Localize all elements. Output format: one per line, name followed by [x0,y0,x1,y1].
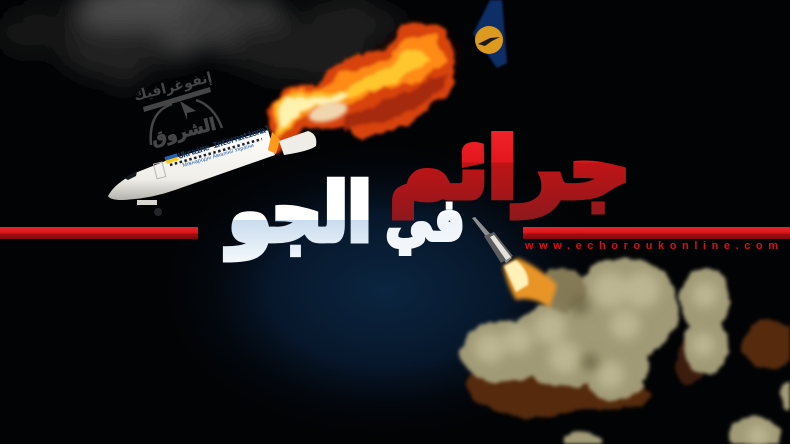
watermark heading: إنفوغرافيك [132,70,214,105]
cloud highlights [475,272,769,444]
broken edge [268,132,280,154]
tail fin [473,0,507,68]
cockpit window [124,171,137,180]
flag [164,153,179,164]
landing gear [137,200,162,216]
fire [268,24,456,152]
flame core [504,260,528,292]
smoke [0,0,405,82]
airline subtitle: Міжнародні Авіалінії України [182,143,255,169]
word: in: في [385,186,465,254]
watermark arrow [180,101,196,120]
explosion cloud [459,258,790,444]
fire pale smoke [306,98,350,126]
cloud shadow [467,321,790,417]
watermark bar [143,87,211,112]
left red bar [0,227,198,239]
title: red: جرائم [390,121,630,218]
cloud shadows inner [571,296,598,370]
rear fragment [279,131,316,155]
website url: www.echoroukonline.com [524,240,778,252]
word: the air: الجو [225,166,371,260]
windows [170,139,262,165]
airline name: Ukraine International [177,124,272,162]
tail badge [475,26,503,54]
missile highlight [490,235,511,260]
blue glow [100,90,700,444]
title: white [225,166,465,260]
logo tail [473,0,507,68]
missile [472,217,557,307]
right red bar [523,227,790,239]
airplane [108,124,316,216]
missile body [472,217,512,263]
door [153,162,166,179]
watermark arc [151,100,222,145]
watermark brand: الشروق [149,114,218,150]
watermark logo [132,70,222,150]
fire flames [268,24,456,152]
fire dark core [320,25,455,125]
fuselage [108,130,275,200]
cloud main [459,258,790,444]
missile fins [484,232,513,263]
exhaust flame [503,258,557,307]
